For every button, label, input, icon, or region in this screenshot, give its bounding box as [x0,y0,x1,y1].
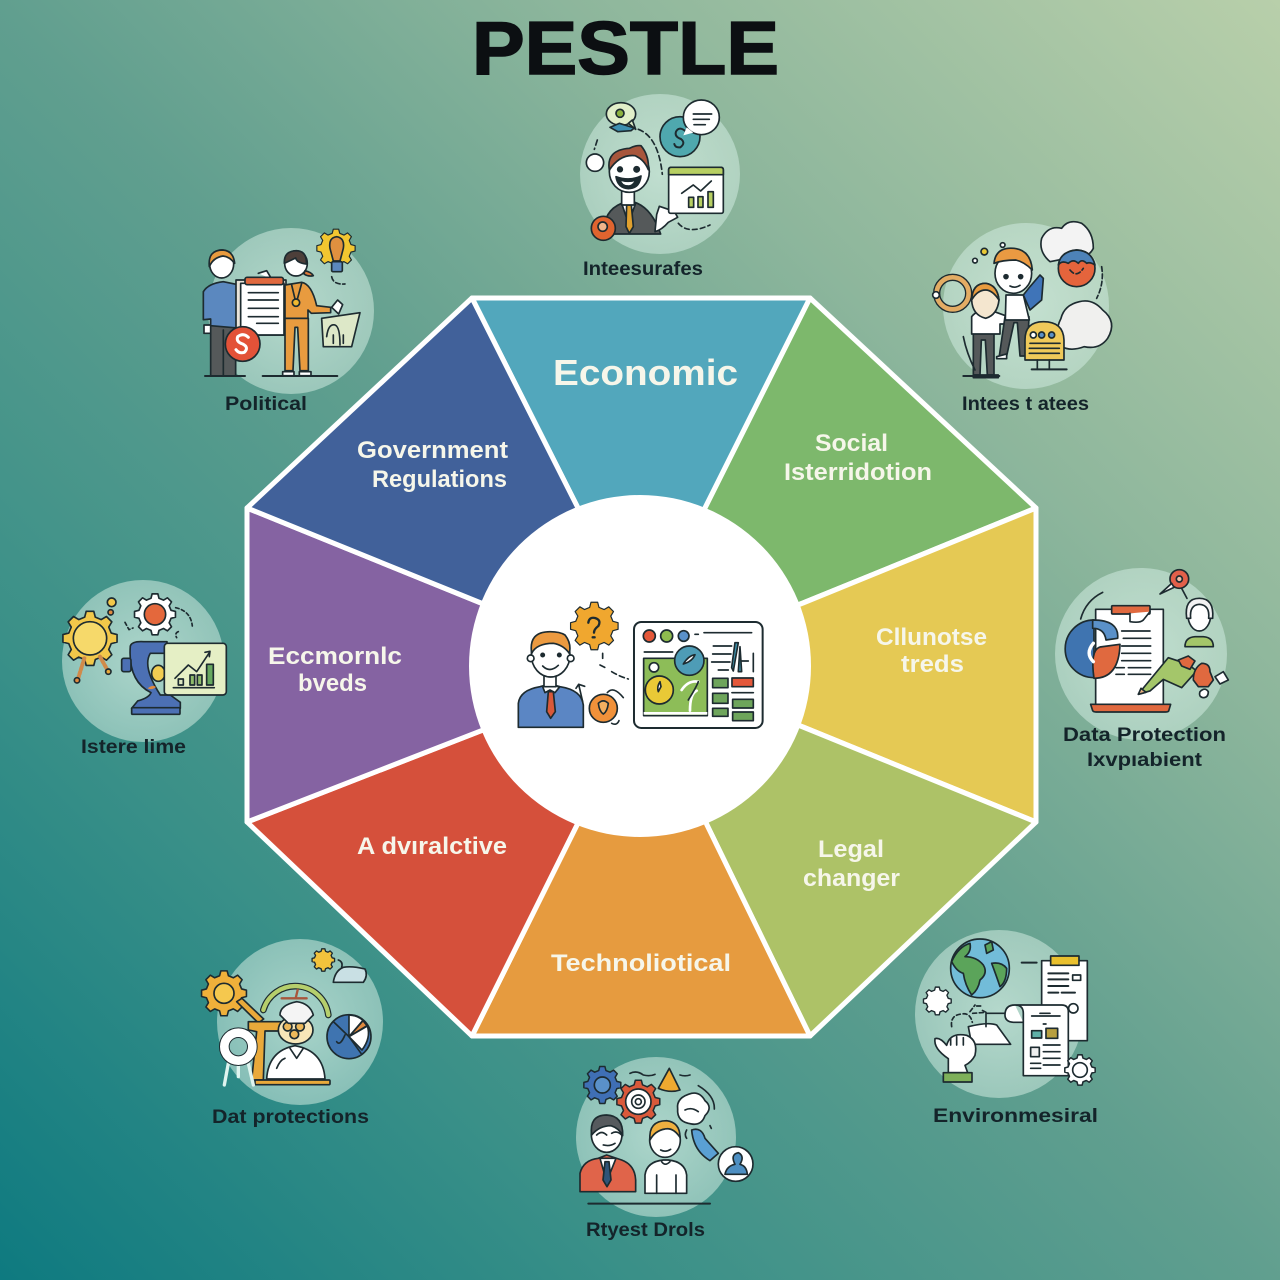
segment: Government Regulations [247,298,640,665]
label: Social: Isterridotion [784,459,932,486]
panel: Data Protection [1055,568,1228,771]
label: Social [784,430,932,486]
label: Eccmornlc bveds [268,643,402,697]
icon: person and dashboard [518,602,763,728]
label: Political [225,393,307,415]
label: Ixvpıabient [1087,749,1203,771]
label: Economic: Economic [553,352,738,393]
label: Inteesurafes [583,258,703,280]
orange badge [576,684,623,724]
label: Eccmornlc bveds: Eccmornlc [268,643,402,670]
label: Rtyest Drols [586,1219,705,1241]
segment: purple [247,508,640,822]
panel: Political [203,228,374,415]
segment: Economic [472,298,810,665]
segment: Legal [640,665,1036,1036]
label: Legal changer: Legal [818,836,884,863]
icon: globe, hand and documents [923,939,1095,1085]
label: Data Protection [1063,724,1226,746]
label: Government Regulations: Regulations [372,466,507,493]
label: Social: Social [815,430,888,457]
label: Legal changer: changer [803,865,900,892]
label: Intees t atees [962,393,1089,415]
center hub [469,495,811,837]
label: Government Regulations [357,437,508,493]
segment: yellow trends [640,508,1036,822]
segment: Technological [472,665,810,1036]
panel: Intees t atees [933,222,1112,415]
icon: clipboard with pie [1065,570,1228,712]
icon: people, robot and clouds [933,222,1112,378]
label: Clunotse treds: treds [901,651,964,678]
label: Government Regulations: Government [357,437,508,464]
gear with question mark [571,602,618,650]
panel: Inteesurafes (top) [580,94,740,280]
label: Istere lime [81,736,186,758]
label: Technoliotical: Technoliotical [551,950,731,977]
dashboard [634,622,763,728]
segment labels [268,352,987,977]
label: Environmesiral [933,1105,1098,1127]
panel: Rtyest Drols [576,1057,753,1241]
segment: red [247,665,640,1036]
panel: Environmental [915,930,1098,1127]
icon: robot arm and scientist [202,949,371,1085]
panel: Istere lime [62,580,226,758]
icon: sun, gear and chart [63,594,226,714]
label: Eccmornlc bveds: bveds [298,670,367,697]
segment: Social [640,298,1036,665]
icon: two people with clipboard [203,229,360,376]
label: Dat protections [212,1106,369,1128]
title: PESTLE [472,6,779,90]
label [1063,724,1226,771]
panel: Dat protections [202,939,383,1128]
icon: two people with gears [580,1067,753,1204]
label: A dviralctive: A dvıralctive [357,833,507,860]
label: Clunotse treds [876,624,987,678]
label: Clunotse treds: Cllunotse [876,624,987,651]
octagon wheel [247,298,1036,1036]
person [518,632,583,727]
label: Legal changer [803,836,900,892]
icon: businessman with chart [586,100,723,240]
